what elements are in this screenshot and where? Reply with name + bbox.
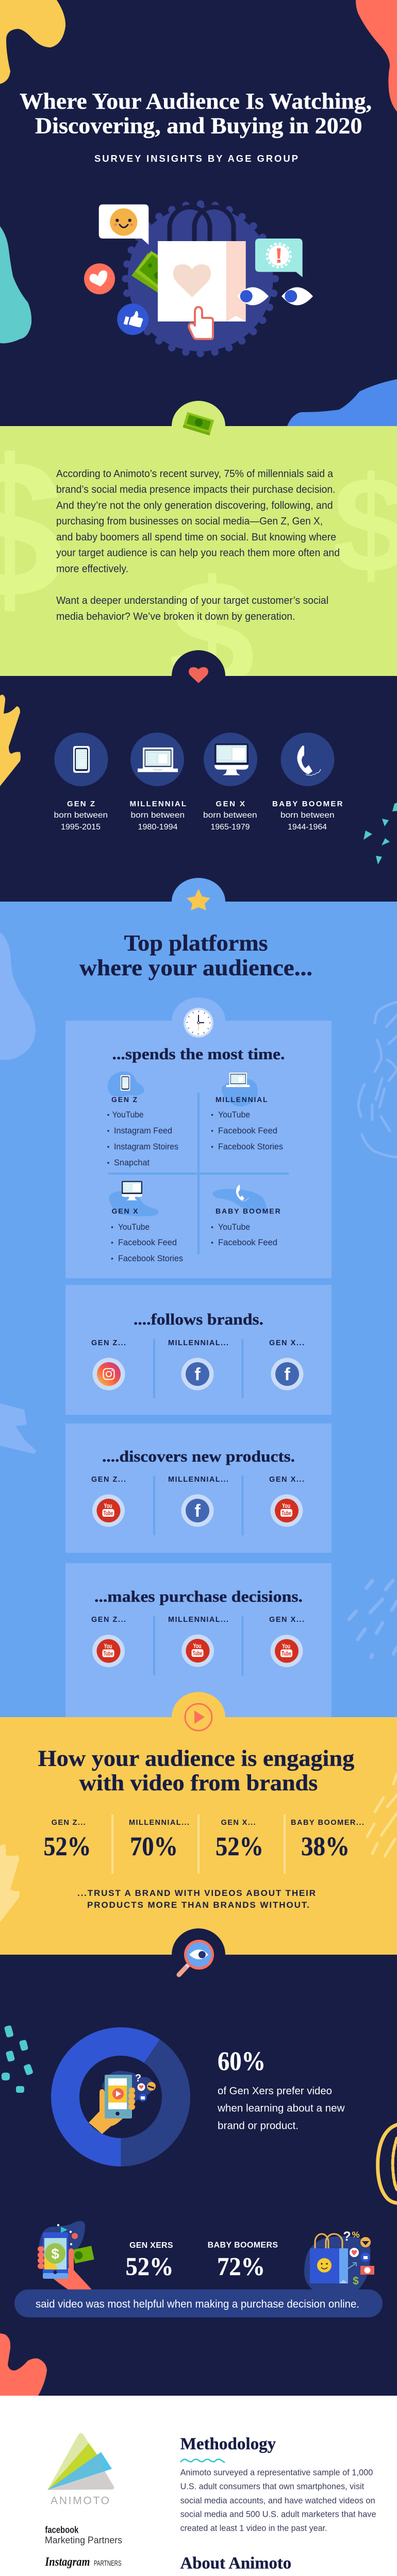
section: about xyxy=(0,2396,397,2576)
stat: 60% of Gen Xers: brand or product. xyxy=(218,2120,299,2132)
subtitle: SURVEY INSIGHTS BY AGE GROUP xyxy=(94,153,298,164)
section: generations xyxy=(0,676,397,902)
grid dividers xyxy=(108,1093,289,1255)
blob: pale leaf left xyxy=(0,1844,20,1922)
panel: follows brands: MILLENNIAL... xyxy=(168,1339,228,1347)
stat row: GEN Z... xyxy=(52,1819,86,1827)
partner: Facebook Marketing Partners: facebook xyxy=(45,2525,79,2535)
icon: play button xyxy=(185,1704,212,1731)
intro text: And they’re not the only generation discovering, following, and xyxy=(56,500,333,511)
stat: Gen Xers 52%: GEN XERS xyxy=(129,2241,173,2250)
panel heading: ...spends the most time. xyxy=(112,1045,285,1063)
callout: trust statement xyxy=(77,1888,316,1910)
chalk ring: yellow xyxy=(378,2125,397,2203)
panel: follows brands xyxy=(65,1285,332,1415)
heading: video engagement: with video from brands xyxy=(79,1770,318,1795)
generation: Baby Boomer: 1944-1964 xyxy=(288,823,327,832)
blob: yellow top left xyxy=(0,0,65,84)
Gen Z list: Instagram Feed xyxy=(114,1126,172,1136)
intro text: media behavior? We’ve broken it down by generation. xyxy=(56,611,295,622)
methodology: Animoto surveyed a representative sample of 1,000 xyxy=(180,2468,373,2478)
panel: follows brands: GEN Z... xyxy=(91,1339,126,1347)
illustration: phone with dollar: $ xyxy=(51,2246,59,2262)
Millennial list: Facebook Feed xyxy=(218,1126,277,1136)
title: Where Your Audience Is Watching, xyxy=(20,89,372,114)
Gen X list: Facebook Feed xyxy=(118,1238,177,1247)
blob: pale left xyxy=(0,933,36,1060)
illustration: shopping bag with reactions: ? xyxy=(343,2229,351,2244)
Gen Z list: YouTube xyxy=(112,1110,143,1120)
bag body xyxy=(158,241,246,321)
panel: makes purchase decisions: GEN Z... xyxy=(91,1616,126,1624)
generation: Millennial: MILLENNIAL xyxy=(130,800,186,808)
panel: makes purchase decisions: ...makes purchase decisions. xyxy=(94,1587,303,1605)
icon: facebook xyxy=(181,1358,213,1390)
blob: coral bottom left xyxy=(0,2333,47,2396)
heading: video engagement xyxy=(38,1745,354,1795)
scalloped badge xyxy=(126,204,275,353)
blob: coral top right xyxy=(356,0,397,112)
dome: navy into green xyxy=(172,650,225,676)
illustration: shopping bag with reactions: $ xyxy=(353,2275,359,2287)
icon: thumbs up circle xyxy=(117,303,148,335)
partner: Instagram Partners xyxy=(45,2555,122,2569)
section: hero background xyxy=(0,0,397,426)
icon: youtube: You xyxy=(193,1642,202,1650)
panel: makes purchase decisions: GEN X... xyxy=(269,1616,304,1624)
stat row: MILLENNIAL... xyxy=(129,1819,189,1827)
generation: Millennial: born between xyxy=(131,811,185,820)
icon: instagram xyxy=(93,1358,125,1390)
brush marks: teal xyxy=(363,803,397,865)
panel: follows brands: ....follows brands. xyxy=(134,1310,263,1328)
callout pill: said video was most helpful when making a purchase decision online. xyxy=(36,2298,359,2310)
dome: green into hero xyxy=(172,401,225,426)
Gen X list: Facebook Stories xyxy=(118,1254,183,1263)
panel: discovers new products: MILLENNIAL... xyxy=(168,1476,228,1484)
generation: Baby Boomer xyxy=(272,733,343,832)
callout pill xyxy=(14,2290,383,2317)
icon: clock xyxy=(184,1008,213,1038)
heading: top platforms xyxy=(79,930,312,980)
icon: facebook: f xyxy=(194,1501,201,1521)
panel: discovers new products xyxy=(65,1423,332,1553)
generation: Gen X: born between xyxy=(203,811,257,820)
panel: follows brands: GEN X... xyxy=(269,1339,304,1347)
generation: Baby Boomer: BABY BOOMER xyxy=(272,800,343,808)
methodology: social media and 500 U.S. adult marketers that have xyxy=(180,2510,376,2519)
intro text: Want a deeper understanding of your target customer’s social xyxy=(56,595,328,606)
Baby Boomer list: BABY BOOMER xyxy=(216,1207,280,1215)
generation: Gen Z: born between xyxy=(54,811,108,820)
icon: magnifier with eye xyxy=(179,1941,212,1975)
panel: discovers new products: GEN Z... xyxy=(91,1476,126,1484)
icon: youtube: Tube xyxy=(282,1650,291,1657)
illustration: phone with dollar xyxy=(38,2221,94,2290)
stat: Baby Boomers 72% xyxy=(208,2241,278,2281)
partner: Instagram Partners: PARTNERS xyxy=(94,2559,122,2568)
Millennial list: YouTube xyxy=(218,1110,250,1120)
Baby Boomer list xyxy=(211,1185,280,1247)
icon: heart xyxy=(189,667,208,683)
icon: facebook xyxy=(181,1494,213,1527)
Gen Z list: GEN Z xyxy=(111,1095,137,1104)
stat: 60% of Gen Xers: of Gen Xers prefer video xyxy=(218,2085,332,2097)
icon: star xyxy=(187,889,210,910)
stat: Baby Boomers 72%: BABY BOOMERS xyxy=(208,2241,278,2249)
background dollar signs xyxy=(0,450,397,676)
intro text: brand’s social media presence impacts their purchase decision. xyxy=(56,484,335,496)
about Animoto: About Animoto xyxy=(180,2554,291,2573)
Gen Z list xyxy=(107,1072,178,1167)
brush marks: pale right xyxy=(367,1774,397,1856)
Gen X list: YouTube xyxy=(118,1223,150,1232)
stat row: 70% xyxy=(130,1832,178,1861)
intro text: more effectively. xyxy=(56,564,128,575)
stat: Gen Xers 52% xyxy=(126,2241,173,2281)
icon: youtube: You xyxy=(282,1502,290,1510)
partner: Instagram Partners: Instagram xyxy=(45,2555,90,2569)
icon: youtube xyxy=(92,1635,125,1667)
illustration: shopping bag with reactions: % xyxy=(352,2230,360,2240)
methodology xyxy=(180,2435,376,2533)
panel: spends the most time xyxy=(65,997,332,1278)
stat row: 52% xyxy=(43,1832,91,1861)
hero illustration: shopping bag badge xyxy=(84,204,313,353)
generation: Gen Z: 1995-2015 xyxy=(61,823,101,832)
methodology: Methodology xyxy=(180,2435,276,2453)
section: yellow video engagement xyxy=(0,1717,397,1955)
icon: youtube: You xyxy=(282,1642,290,1650)
blob: yellow leaf left xyxy=(0,694,21,786)
stat row: BABY BOOMER... xyxy=(291,1819,364,1827)
heading: top platforms: where your audience... xyxy=(79,955,312,980)
stat: 60% of Gen Xers: when learning about a new xyxy=(217,2102,345,2114)
logo: Animoto: ANIMOTO xyxy=(51,2495,109,2506)
heading: video engagement: How your audience is engaging xyxy=(38,1745,354,1771)
icon: youtube xyxy=(270,1494,303,1527)
stat row xyxy=(43,1815,364,1874)
icon: facebook xyxy=(271,1358,303,1390)
section: navy video stats xyxy=(0,1955,397,2396)
intro text xyxy=(56,468,340,622)
stat: 60% of Gen Xers: 60% xyxy=(218,2047,266,2076)
partner: Facebook Marketing Partners xyxy=(45,2525,122,2545)
logo: Animoto xyxy=(47,2433,114,2506)
Millennial list: MILLENNIAL xyxy=(216,1095,268,1104)
title: Discovering, and Buying in 2020 xyxy=(35,113,362,139)
generation: Baby Boomer: born between xyxy=(280,811,335,820)
brush marks: pale circle right xyxy=(358,1002,397,1157)
icon: money bundle xyxy=(183,412,214,435)
intro text: and baby boomers all spend time on social. But knowing where xyxy=(56,532,336,543)
Gen X list: GEN X xyxy=(111,1207,138,1215)
panel: discovers new products: ....discovers new products. xyxy=(102,1447,295,1465)
icon: money xyxy=(131,251,161,293)
chart: donut 60% xyxy=(51,2027,190,2166)
icon: youtube xyxy=(181,1634,214,1667)
illustration: hand holding phone: ? xyxy=(135,2073,141,2084)
illustration: shopping bag with reactions xyxy=(304,2229,374,2290)
blob: teal left xyxy=(0,226,31,343)
title xyxy=(20,89,372,139)
stat row: GEN X... xyxy=(221,1819,256,1827)
generation: Gen X xyxy=(203,733,257,832)
icon: facebook: f xyxy=(194,1365,201,1384)
dome: blue into navy xyxy=(172,878,225,902)
methodology: U.S. adult consumers that own smartphones, visit xyxy=(180,2482,365,2492)
speech bubble: smile xyxy=(99,205,148,245)
brush marks: pale right shards xyxy=(349,1581,397,1657)
icon: youtube: Tube xyxy=(103,1650,113,1657)
generation: Gen Z xyxy=(54,733,108,832)
Baby Boomer list: Facebook Feed xyxy=(218,1238,277,1247)
stat row: 38% xyxy=(301,1832,350,1861)
icon: youtube: You xyxy=(104,1502,112,1510)
icon: hand cursor xyxy=(189,307,213,339)
partner: Facebook Marketing Partners: Marketing Partners xyxy=(45,2535,122,2545)
methodology: created at least 1 video in the past year. xyxy=(180,2523,327,2533)
section: green intro xyxy=(0,426,397,676)
icon: youtube: Tube xyxy=(193,1650,203,1657)
bag handles xyxy=(170,207,234,241)
generation: Gen X: 1965-1979 xyxy=(210,823,250,832)
icon: youtube: Tube xyxy=(282,1510,291,1517)
icon: youtube: Tube xyxy=(103,1510,113,1517)
callout: trust statement: PRODUCTS MORE THAN BRANDS WITHOUT. xyxy=(87,1900,309,1910)
icon: facebook: f xyxy=(284,1365,290,1384)
methodology: social media accounts, and have watched videos on xyxy=(180,2496,375,2505)
brush marks: pale left shard xyxy=(0,1403,37,1454)
section: blue platforms xyxy=(0,902,397,1717)
dome: yellow into blue xyxy=(172,1692,225,1717)
stat row: 52% xyxy=(216,1832,263,1861)
dome: navy into yellow xyxy=(172,1928,225,1955)
panel: discovers new products: GEN X... xyxy=(269,1476,304,1484)
intro text: purchasing from businesses on social media—Gen Z, Gen X, xyxy=(56,516,323,527)
callout: trust statement: ...TRUST A BRAND WITH VIDEOS ABOUT THEIR xyxy=(77,1888,316,1898)
Gen Z list: Snapchat xyxy=(114,1158,150,1167)
icon: heart circle xyxy=(84,263,115,294)
generation: Millennial: 1980-1994 xyxy=(138,823,178,832)
illustration: hand holding phone xyxy=(89,2071,156,2134)
stat: 60% of Gen Xers xyxy=(217,2047,345,2132)
intro text: According to Animoto’s recent survey, 75% of millennials said a xyxy=(56,468,334,480)
blob: blue bottom right xyxy=(287,379,397,426)
Baby Boomer list: YouTube xyxy=(218,1223,250,1232)
background dollar signs: $ xyxy=(169,548,255,721)
Gen Z list: Instagram Stoires xyxy=(114,1142,178,1151)
brush marks: teal left xyxy=(2,2025,34,2093)
generation: Gen Z: GEN Z xyxy=(67,800,95,808)
icon: youtube xyxy=(92,1494,125,1527)
icon: eyes xyxy=(237,287,313,305)
stat: Gen Xers 52%: 52% xyxy=(126,2252,173,2281)
stat: Baby Boomers 72%: 72% xyxy=(217,2252,265,2281)
icon: youtube xyxy=(270,1635,303,1667)
generation: Gen X: GEN X xyxy=(216,800,245,808)
intro text: your target audience is can help you reach them more often and xyxy=(56,547,340,558)
Millennial list: Facebook Stories xyxy=(218,1142,283,1151)
generation: Millennial xyxy=(130,733,186,832)
panel: makes purchase decisions xyxy=(65,1563,332,1717)
heading: top platforms: Top platforms xyxy=(124,930,268,956)
icon: youtube: You xyxy=(104,1642,112,1650)
speech bubble: alert xyxy=(255,239,303,277)
panel: makes purchase decisions: MILLENNIAL... xyxy=(168,1616,228,1624)
Gen X list xyxy=(109,1181,183,1263)
Millennial list xyxy=(211,1073,283,1151)
